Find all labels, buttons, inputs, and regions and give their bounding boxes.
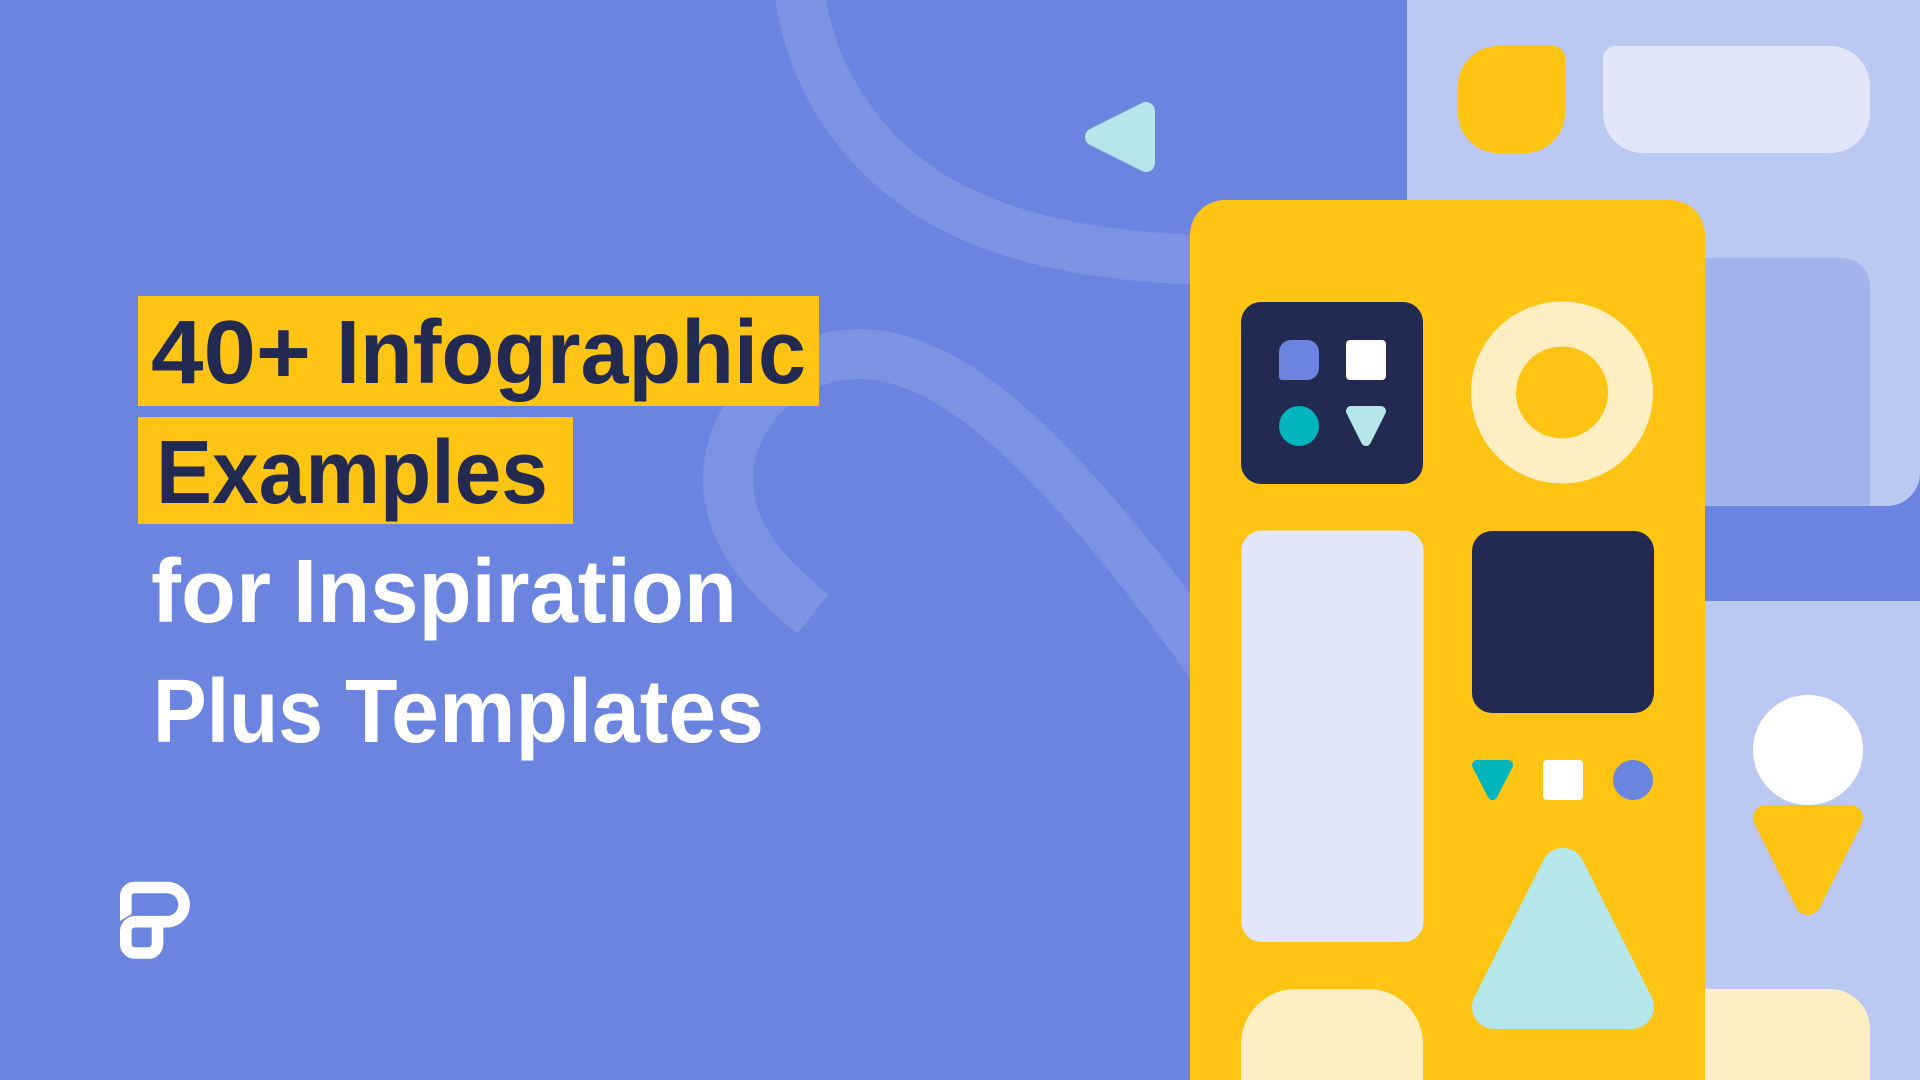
title: line 4: Plus: [153, 662, 323, 762]
icon: yellow downward triangle: [1766, 818, 1850, 902]
dark square: [1472, 531, 1654, 713]
cream donut: [1494, 324, 1630, 461]
panel: upper light blue backdrop: [1407, 0, 1920, 506]
shape: yellow rounded tile: [1458, 46, 1565, 153]
title highlight: line 1: [138, 296, 819, 406]
title highlight: line 2: Examples: [156, 423, 548, 523]
background swoosh: lower curve: [728, 354, 1240, 705]
shape: pale rounded bar: [1603, 46, 1870, 153]
title highlight: line 1: Infographic: [336, 303, 806, 403]
teal mini triangle: [1477, 765, 1508, 795]
dark tile with four mini shapes: [1241, 302, 1423, 484]
title: line 4: Templates: [345, 662, 764, 762]
icon: mint left-pointing triangle: [1094, 111, 1146, 163]
background swoosh: upper curve: [800, 0, 1200, 260]
title: line 3: for: [151, 542, 271, 642]
title: line 3: Inspiration: [293, 542, 737, 642]
pale tall rectangle: [1242, 530, 1424, 942]
icon: white circle: [1753, 695, 1863, 805]
large mint triangle: [1494, 870, 1632, 1007]
title highlight: line 1: 40+: [151, 303, 311, 403]
shape: cream bottom block on backdrop: [1690, 989, 1870, 1080]
cream bottom block in card: [1241, 989, 1423, 1080]
blue mini circle: [1613, 760, 1653, 800]
panel: lower light blue backdrop: [1600, 601, 1920, 1080]
title: line 4: [153, 662, 764, 762]
panel: mid blue block: [1600, 258, 1870, 506]
white mini square: [1543, 760, 1583, 800]
logo: [120, 888, 184, 953]
panel: yellow card: [1190, 200, 1705, 1080]
